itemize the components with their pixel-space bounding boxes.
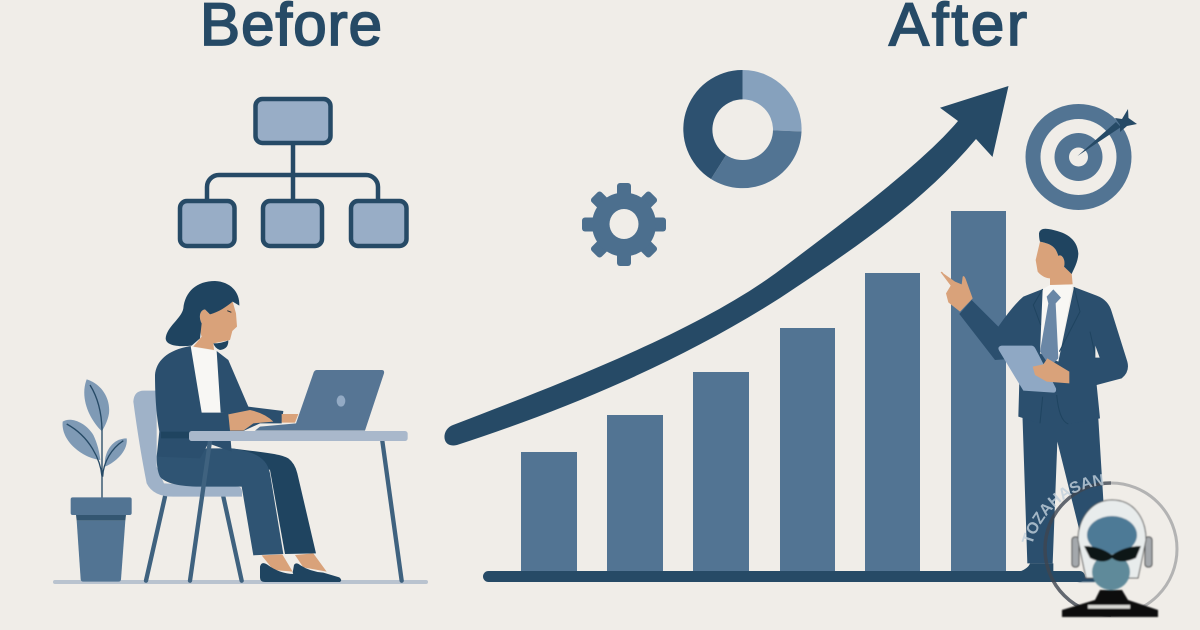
watermark text: TOZAHASAN <box>1022 474 1104 542</box>
growth arrow <box>444 86 1008 446</box>
shirt <box>191 347 221 413</box>
icon: donut chart <box>683 70 802 188</box>
ground line: left scene <box>53 580 428 584</box>
eye <box>227 311 231 312</box>
bar chart <box>483 211 1085 582</box>
man: jacket seams <box>1033 287 1096 424</box>
icon: org chart <box>180 99 406 246</box>
illustration: woman at desk with laptop <box>133 281 408 582</box>
icon: gear <box>582 183 666 266</box>
man: shoe <box>1019 563 1053 582</box>
man: face and neck <box>1036 242 1073 286</box>
man: pointing hand <box>941 272 973 312</box>
man: jacket <box>959 287 1128 424</box>
laptop <box>255 370 384 431</box>
desk <box>189 431 408 581</box>
icon: target with dart <box>1026 104 1137 210</box>
man: hand on tablet <box>1033 358 1069 383</box>
woman: upper body and head <box>155 281 298 458</box>
man: tie <box>1040 289 1061 367</box>
illustration: plant in pot <box>63 379 132 582</box>
robot head <box>1062 500 1158 617</box>
hands <box>228 410 298 431</box>
jacket <box>155 346 232 458</box>
sleeve <box>217 351 283 431</box>
belt <box>161 432 189 438</box>
man: hair <box>1039 229 1078 274</box>
woman: trousers <box>232 448 316 554</box>
chin hair <box>213 340 228 350</box>
man: shirt <box>1039 284 1073 362</box>
woman: feet <box>262 553 327 572</box>
man: tablet <box>998 346 1056 393</box>
man: arm gap <box>1095 346 1100 358</box>
man: trousers <box>1022 392 1105 563</box>
woman: shoes <box>260 563 341 582</box>
chair <box>133 391 242 581</box>
watermark badge <box>1022 474 1178 618</box>
face and neck <box>193 302 237 350</box>
hair <box>166 281 239 346</box>
illustration: man in suit with tablet <box>941 229 1128 582</box>
